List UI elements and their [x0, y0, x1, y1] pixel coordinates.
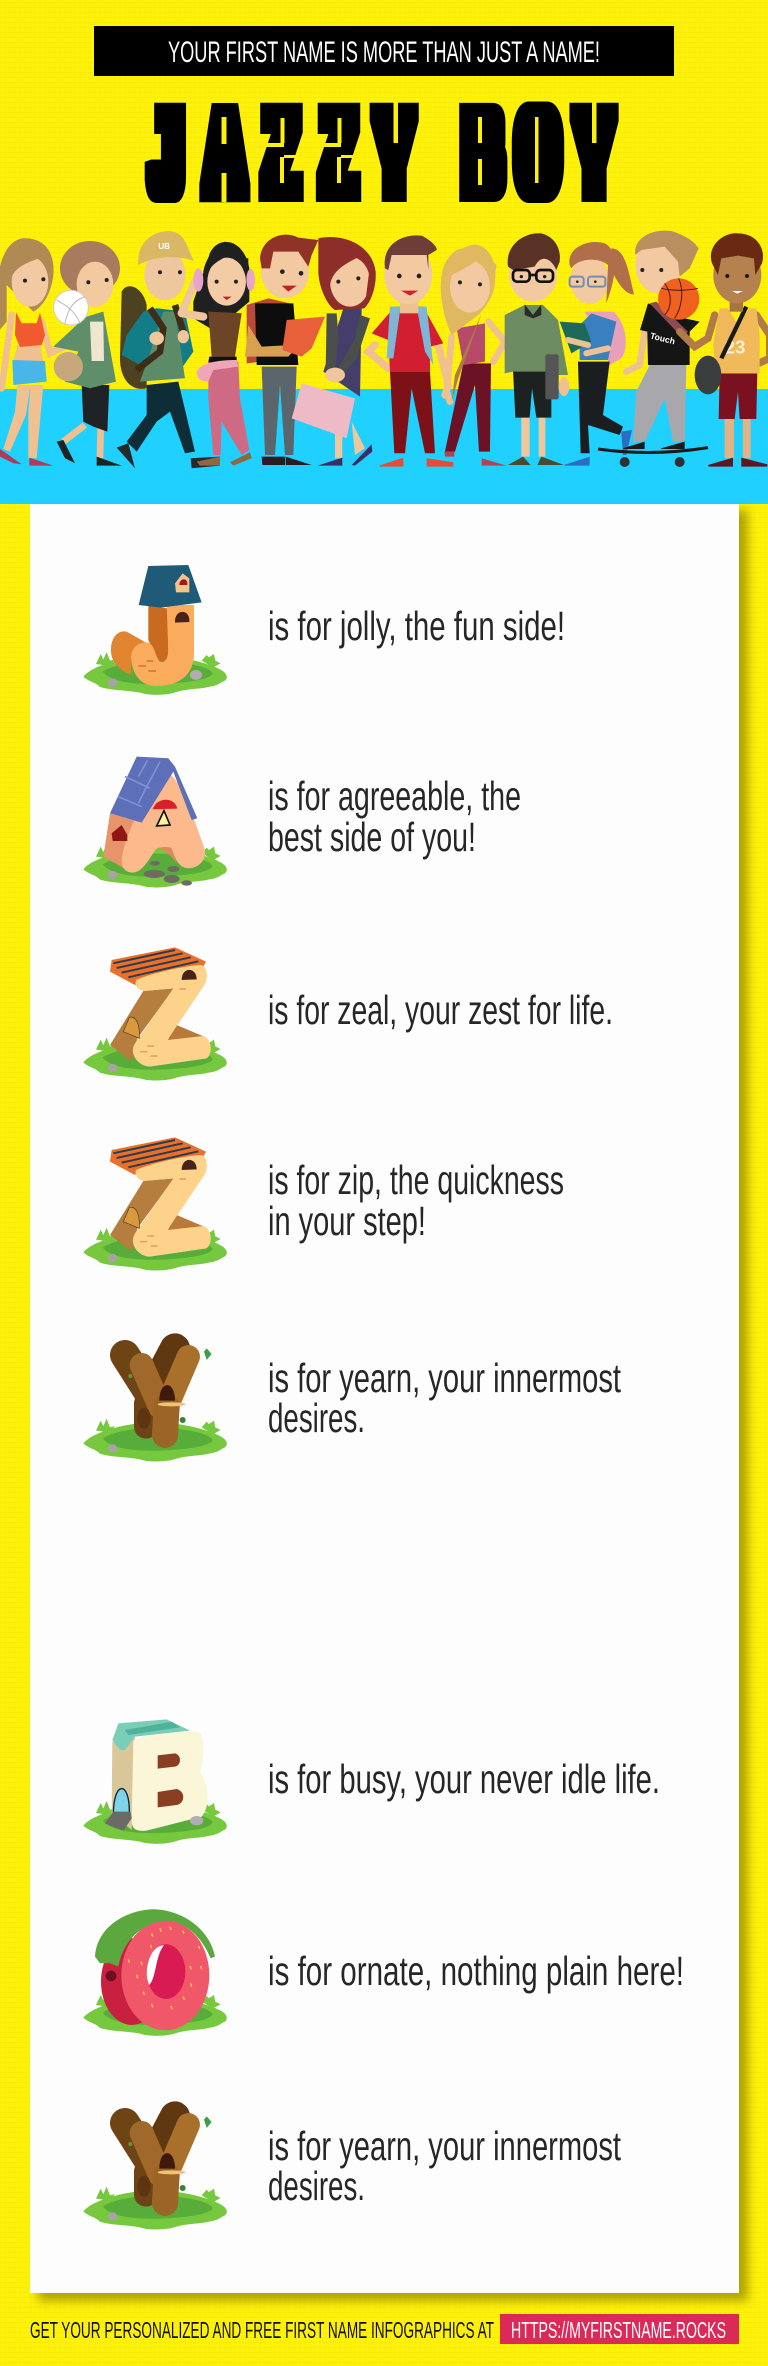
icon: letter Y tree house: [83, 1348, 227, 1462]
person 1: girl in orange top: [0, 238, 75, 466]
icon: letter J house: [83, 565, 227, 695]
text: Y: is for yearn, your innermost: [268, 1355, 621, 1401]
text: second Z: is for zip, the quickness: [268, 1157, 564, 1203]
person 6: girl with pink bag: [292, 237, 376, 466]
person 9: boy with glasses: [505, 233, 569, 465]
blue floor band: [0, 389, 768, 504]
text: Y: [268, 1355, 621, 1441]
person 3: boy with backpack and cap: UB: [158, 242, 170, 251]
text: Z: is for zeal, your zest for life.: [268, 987, 613, 1033]
icon: letter A house: [83, 757, 227, 887]
title: JAZZY BOY: [153, 87, 611, 219]
text: A: best side of you!: [268, 814, 476, 860]
group of cartoon people: [0, 231, 768, 468]
person 12: boy in yellow tank top: [680, 233, 768, 467]
person 8: blonde girl: [441, 245, 507, 466]
person 11: boy on skateboard with basketball: [598, 231, 708, 467]
person 2: girl with volleyball: [53, 241, 122, 466]
icon: second letter Y tree house: [83, 2116, 227, 2230]
icon: letter B house: [83, 1719, 227, 1844]
icon: letter O donut: [83, 1909, 227, 2036]
person 7: boy in red shirt: [368, 235, 453, 467]
text: second Y: desires.: [268, 2163, 365, 2209]
text: A: [268, 773, 521, 860]
icon: letter Z house: [83, 947, 227, 1081]
top banner: [94, 26, 674, 76]
white panel with drop shadow: [30, 504, 748, 2301]
person 10: girl with ponytail and tablet: [560, 242, 634, 466]
text: second Y: is for yearn, your innermost: [268, 2123, 621, 2169]
text: J: is for jolly, the fun side!: [268, 603, 565, 649]
person 5: boy with open book: [245, 235, 325, 465]
text: A: is for agreeable, the: [268, 773, 521, 819]
person 4: girl with headphones: [182, 242, 255, 466]
text: second Z: in your step!: [268, 1198, 426, 1244]
text: second Z: [268, 1157, 564, 1244]
text: Y: desires.: [268, 1395, 365, 1441]
text: second Y: [268, 2123, 621, 2209]
person 3: boy with backpack and cap: [117, 231, 220, 468]
icon: second letter Z house: [83, 1137, 227, 1271]
person 12: boy in yellow tank top: 23: [725, 336, 745, 357]
person 11: boy on skateboard with basketball: Touch: [649, 331, 676, 346]
